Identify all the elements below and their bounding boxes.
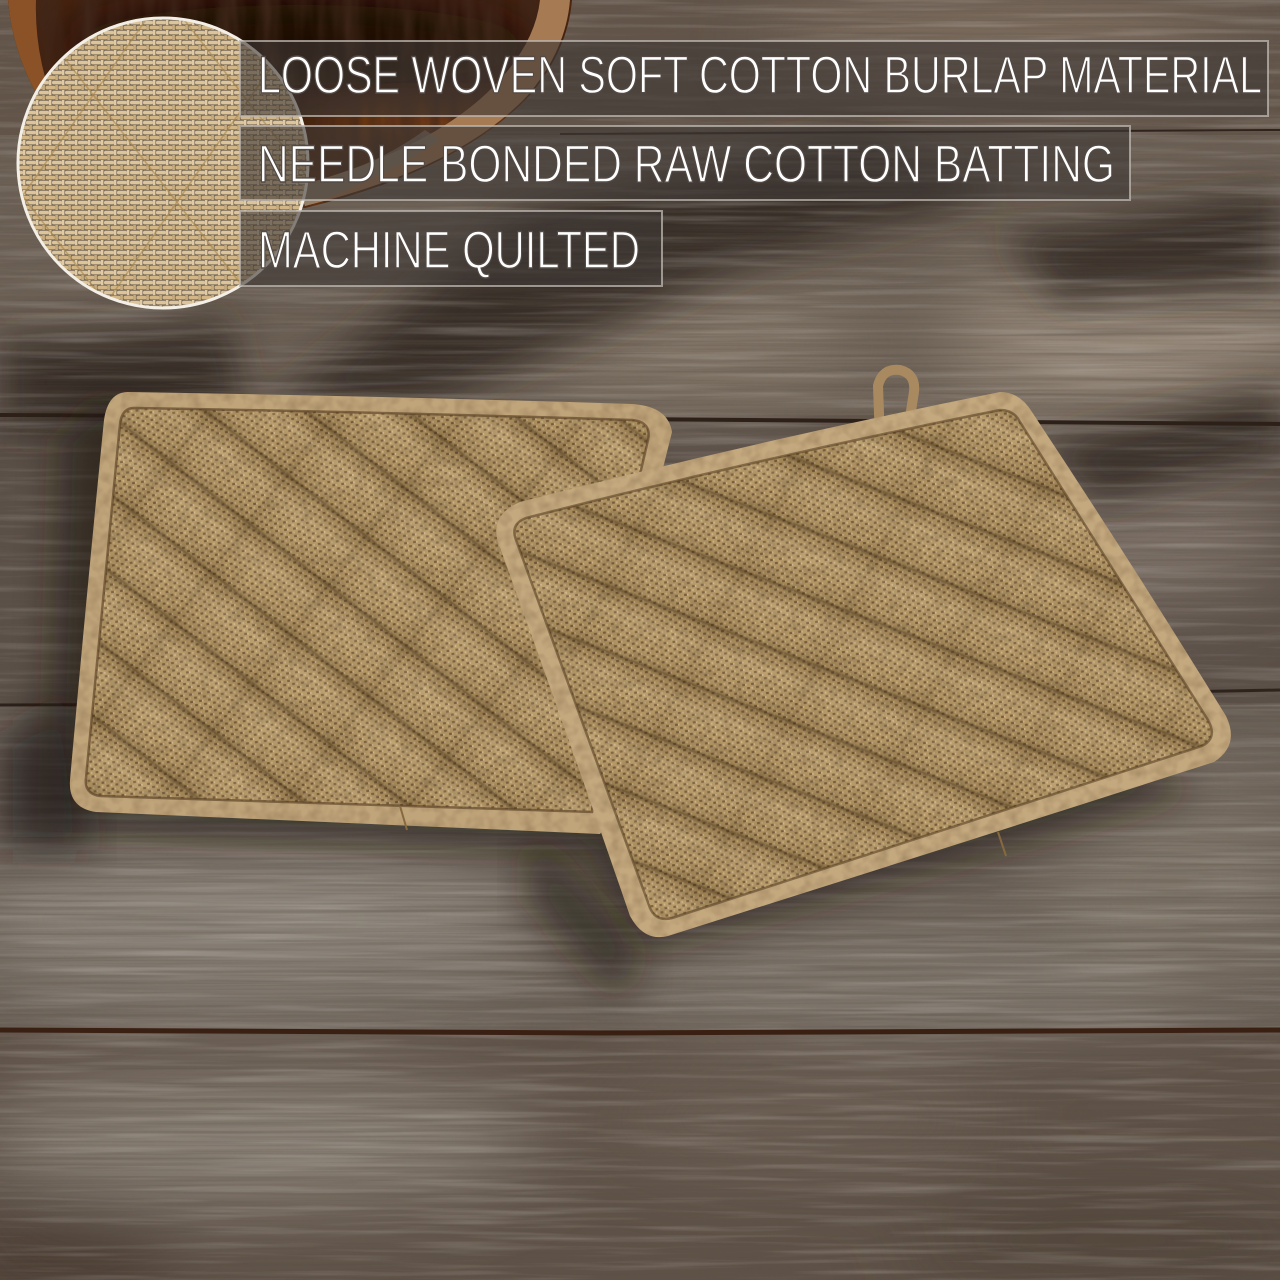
callout: needle bonded raw cotton batting: [240, 126, 1130, 200]
left binding fold: [400, 806, 407, 830]
wooden bowl: [8, 0, 572, 208]
pot holder: left: [60, 385, 680, 845]
pot holder: right: [490, 370, 1240, 945]
leaf shadows: [0, 130, 1280, 505]
callout: machine quilted: MACHINE QUILTED: [258, 221, 640, 280]
right quilted body: [490, 385, 1240, 945]
shadows under pot holders: [0, 400, 1200, 1000]
left quilted body: [60, 385, 680, 845]
right binding fold: [998, 832, 1006, 856]
hanging loop: [878, 370, 914, 440]
callout: machine quilted: [240, 211, 662, 286]
plank seams: [0, 415, 1280, 424]
material close-up circle: [18, 18, 308, 308]
